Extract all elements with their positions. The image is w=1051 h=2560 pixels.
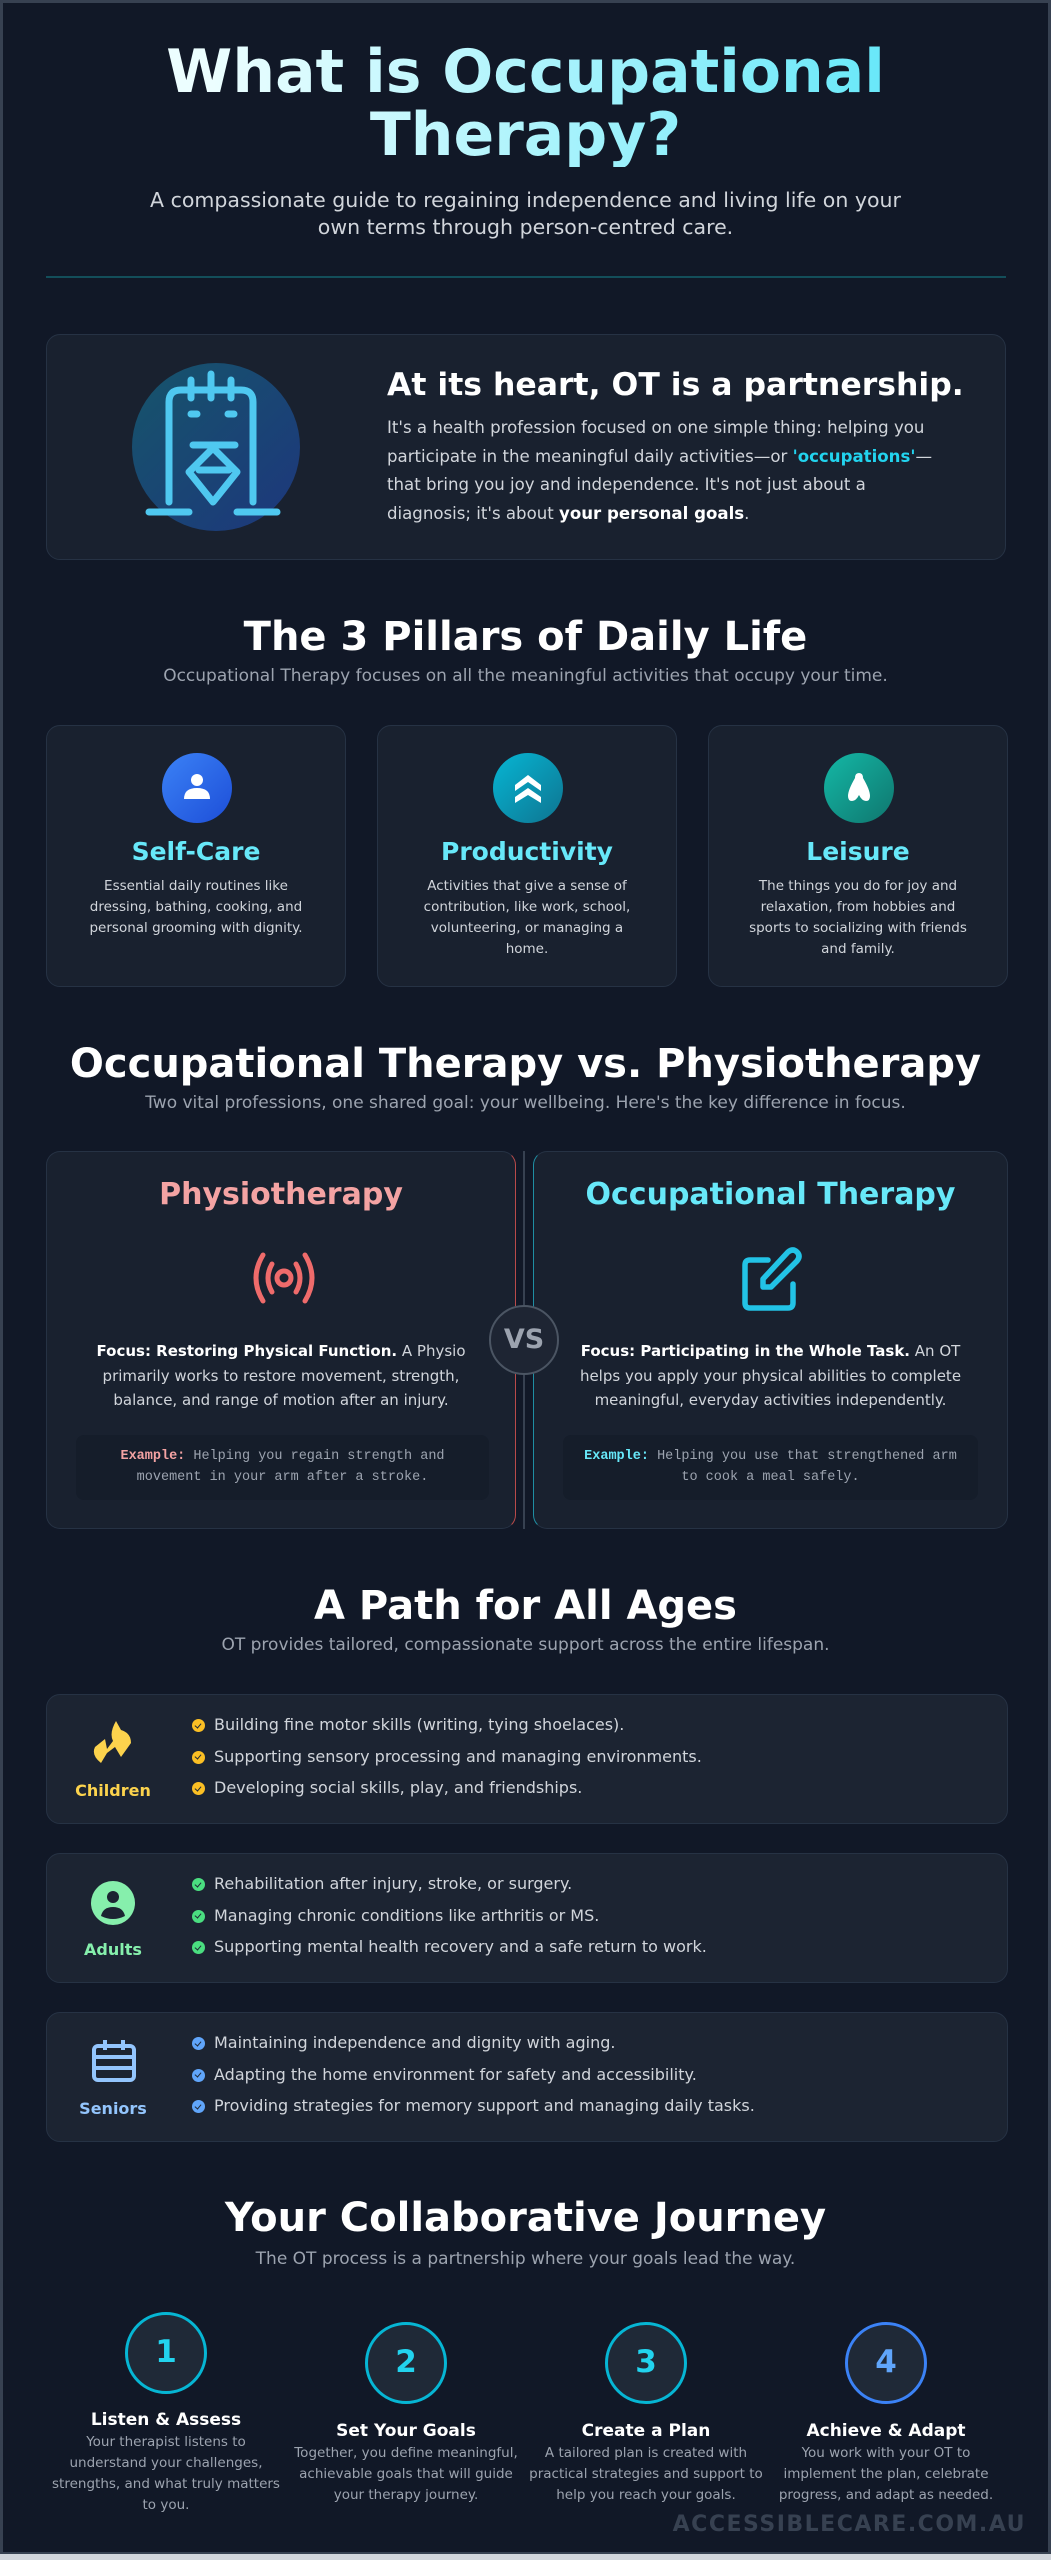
heading: At its heart, OT is a partnership. — [387, 367, 964, 403]
panel: physiotherapy — [46, 1151, 516, 1529]
panel: self-care: Self-Care — [132, 837, 260, 866]
step 2: Together, you define meaningful, achievable goals that will guide your therapy journey. — [294, 2445, 518, 2503]
step 1 — [52, 2312, 280, 2513]
step 3 — [529, 2322, 763, 2503]
panel: productivity: Productivity — [441, 837, 613, 866]
panel: intro partnership — [46, 334, 1006, 560]
panel: self-care: Essential daily routines like dressing, bathing, cooking, and personal grooming with dignity. — [89, 878, 303, 936]
step 1: 1 — [155, 2334, 177, 2370]
example box — [563, 1435, 978, 1500]
step 4: Achieve & Adapt — [806, 2421, 966, 2441]
panel: seniors: Adapting the home environment for safety and accessibility. — [214, 2064, 697, 2084]
icon: chevrons — [493, 753, 563, 823]
panel: children: Developing social skills, play, and friendships. — [214, 1778, 582, 1797]
panel: adults: Supporting mental health recovery and a safe return to work. — [214, 1937, 707, 1956]
panel: children — [46, 1694, 1008, 1824]
icon: adult — [91, 1881, 135, 1925]
panel: occupational therapy — [533, 1151, 1008, 1529]
title: What is Occupational — [166, 37, 885, 107]
subtitle — [150, 188, 901, 239]
heading: 3 pillars: The 3 Pillars of Daily Life — [244, 614, 807, 660]
title: Therapy? — [370, 100, 681, 170]
step 3: A tailored plan is created with practical strategies and support to help you reach your goals. — [529, 2445, 763, 2503]
panel: adults: Rehabilitation after injury, stroke, or surgery. — [214, 1874, 572, 1893]
subtitle: comparison: Two vital professions, one shared goal: your wellbeing. Here's the key difference in focus. — [145, 1093, 906, 1113]
panel: seniors: Maintaining independence and dignity with aging. — [214, 2033, 615, 2052]
subtitle: A compassionate guide to regaining independence and living life on your — [150, 188, 901, 212]
body text: It's a health profession focused on one simple thing: helping you participate in the meaningful daily activities—or 'occupations'—that bring you joy and independence. It's not just about a diagnosis; it's about your personal goals. — [387, 418, 932, 522]
panel: occupational therapy: Occupational Therapy — [586, 1177, 955, 1212]
icon: notepad — [132, 363, 300, 531]
example box: movement in your arm after a stroke. — [137, 1470, 428, 1485]
panel: children: Supporting sensory processing and managing environments. — [214, 1746, 702, 1766]
heading: journey: Your Collaborative Journey — [225, 2195, 826, 2241]
panel: productivity — [377, 725, 677, 987]
example box: Example: Helping you use that strengthened arm — [584, 1449, 957, 1464]
panel: seniors: Seniors — [79, 2099, 147, 2118]
icon: leisure — [824, 753, 894, 823]
step 1: Your therapist listens to understand your challenges, strengths, and what truly matters to you. — [52, 2434, 280, 2513]
subtitle: pillars: Occupational Therapy focuses on all the meaningful activities that occupy your time. — [163, 666, 888, 686]
step 2: 2 — [395, 2344, 417, 2380]
panel: adults: Managing chronic conditions like arthritis or MS. — [214, 1906, 599, 1924]
panel: leisure: The things you do for joy and relaxation, from hobbies and sports to socializing with friends and family. — [749, 878, 967, 957]
example box: to cook a meal safely. — [681, 1470, 860, 1485]
panel: self-care — [46, 725, 346, 987]
panel: productivity: Activities that give a sense of contribution, like work, school, volunteering, or managing a home. — [424, 878, 630, 957]
panel: children: Building fine motor skills (writing, tying shoelaces). — [214, 1715, 624, 1734]
icon: calendar — [92, 2040, 136, 2082]
step 2 — [294, 2322, 518, 2503]
VS badge: VS — [504, 1324, 544, 1355]
panel: leisure — [708, 725, 1008, 987]
heading: OT vs Physio: Occupational Therapy vs. Physiotherapy — [70, 1041, 981, 1087]
title — [3, 41, 1048, 167]
VS badge — [489, 1305, 559, 1375]
subtitle: own terms through person-centred care. — [318, 215, 733, 239]
panel: leisure: Leisure — [806, 837, 910, 866]
step 4: You work with your OT to implement the plan, celebrate progress, and adapt as needed. — [779, 2445, 993, 2503]
panel: seniors — [46, 2012, 1008, 2142]
example box — [76, 1435, 489, 1500]
icon: edit — [742, 1247, 802, 1311]
step 1: Listen & Assess — [91, 2410, 241, 2430]
panel: adults — [46, 1853, 1008, 1983]
watermark: ACCESSIBLECARE.COM.AU — [673, 2512, 1026, 2537]
icon: children — [94, 1721, 131, 1763]
icon: person — [162, 753, 232, 823]
panel: physiotherapy: Physiotherapy — [159, 1177, 403, 1212]
step 3: Create a Plan — [582, 2421, 710, 2441]
panel: adults: Adults — [84, 1940, 142, 1959]
subtitle: journey: The OT process is a partnership where your goals lead the way. — [256, 2249, 795, 2269]
subtitle: ages: OT provides tailored, compassionate support across the entire lifespan. — [221, 1635, 830, 1655]
panel: physiotherapy: Focus: Restoring Physical Function. A Physio primarily works to restore movement, strength, balance, and range of motion after an injury. — [96, 1342, 466, 1409]
step 4 — [779, 2322, 993, 2503]
step 2: Set Your Goals — [336, 2421, 476, 2441]
example box: Example: Helping you regain strength and — [120, 1449, 445, 1464]
panel: occupational therapy: Focus: Participating in the Whole Task. An OT helps you apply your physical abilities to complete meaningful, everyday activities independently. — [580, 1342, 961, 1409]
icon: signal — [253, 1252, 314, 1304]
step 3: 3 — [635, 2344, 657, 2380]
panel: seniors: Providing strategies for memory support and managing daily tasks. — [214, 2096, 755, 2115]
step 4: 4 — [875, 2344, 897, 2380]
heading: ages: A Path for All Ages — [314, 1583, 737, 1629]
panel: children: Children — [75, 1781, 151, 1800]
